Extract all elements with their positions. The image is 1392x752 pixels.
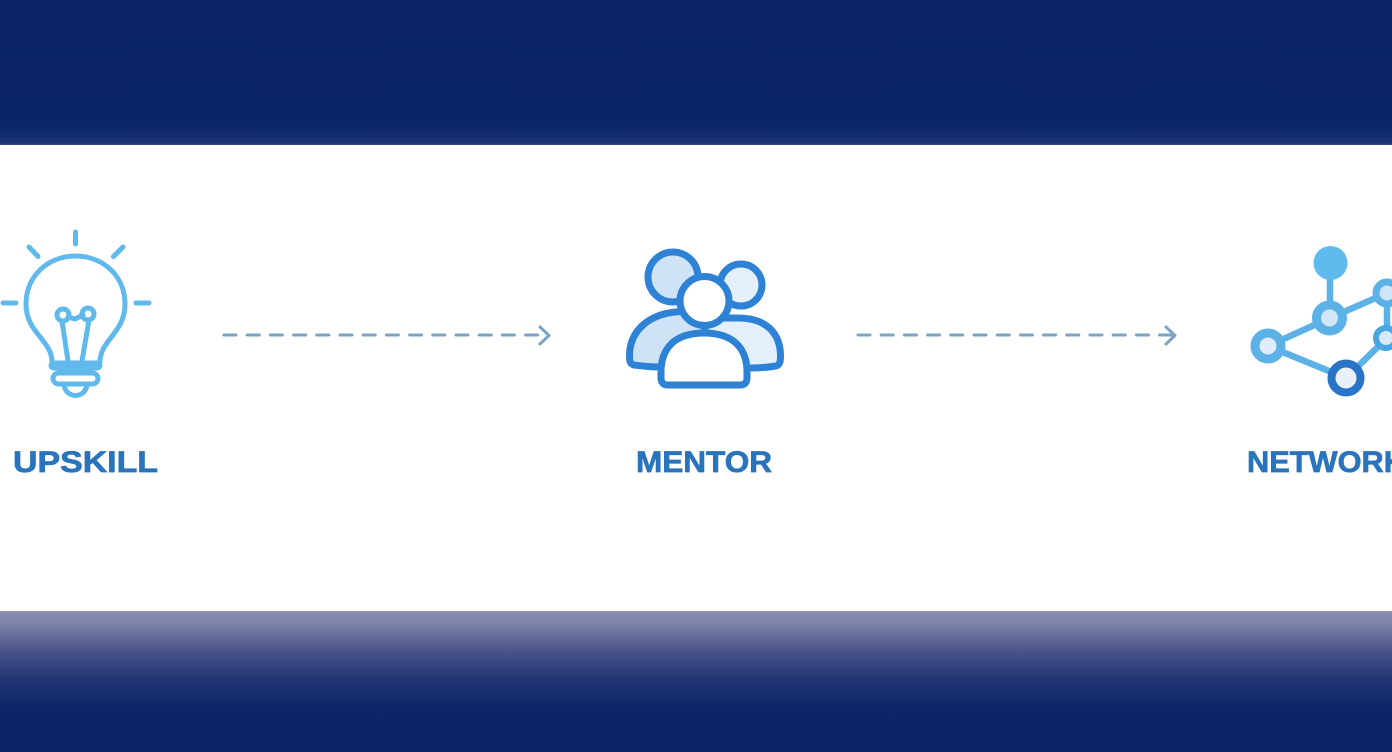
dark bottom node xyxy=(1332,364,1360,392)
upper right node xyxy=(1376,282,1392,304)
icon: light bulb xyxy=(3,232,149,396)
icon: group of people xyxy=(630,252,780,385)
label: MENTOR: MENTOR xyxy=(636,446,772,479)
network links xyxy=(1268,263,1387,378)
back left body xyxy=(630,312,705,367)
arrow: upskill to mentor xyxy=(224,327,549,344)
back right body xyxy=(705,318,780,368)
lower right node xyxy=(1376,328,1392,348)
arrow: mentor to network xyxy=(858,327,1175,344)
middle node xyxy=(1316,305,1342,331)
icon: network graph xyxy=(1255,246,1392,392)
label: UPSKILL: UPSKILL xyxy=(13,446,158,479)
front head xyxy=(680,276,729,326)
front body xyxy=(661,333,747,385)
left node xyxy=(1255,333,1281,359)
back left head xyxy=(648,252,698,302)
back right head xyxy=(720,264,762,306)
top navy band xyxy=(0,0,1392,145)
white central panel xyxy=(0,145,1392,611)
bottom navy gradient band xyxy=(0,611,1392,752)
top node xyxy=(1314,246,1348,280)
